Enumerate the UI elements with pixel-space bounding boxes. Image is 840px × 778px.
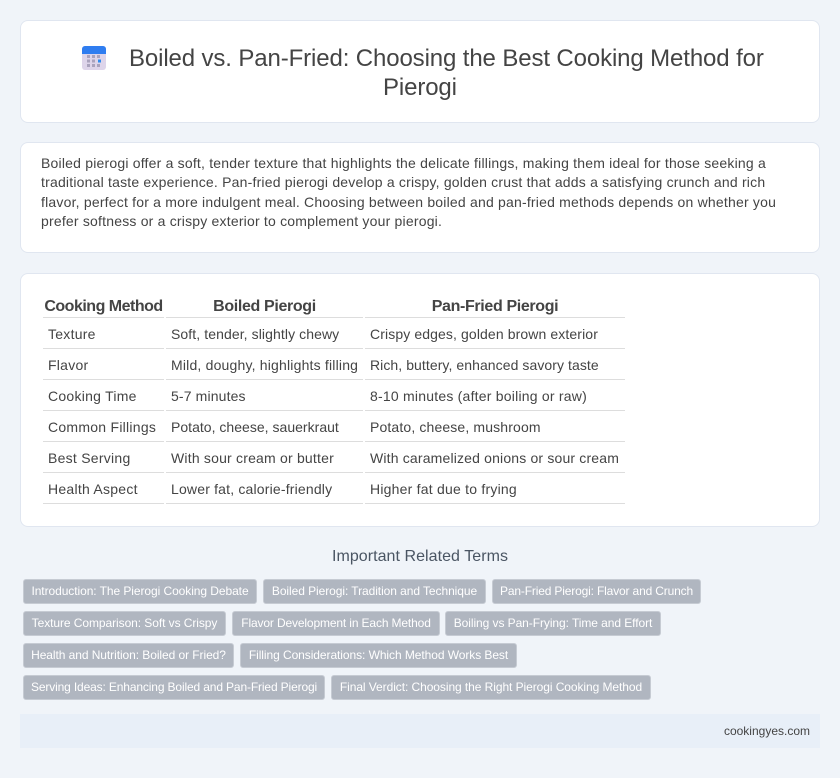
table header: Boiled Pierogi: [213, 298, 316, 315]
heading: title: Pierogi: [383, 74, 457, 101]
row: flavor: [48, 357, 599, 373]
tag: [445, 611, 661, 636]
tag: [263, 579, 486, 604]
tag: Health and Nutrition: Boiled or Fried?: [31, 648, 226, 662]
tag: [23, 675, 325, 700]
heading: important related terms: Important Related Terms: [332, 548, 508, 565]
text block: introduction: prefer softness or a crispy exterior to complement your pierogi.: [41, 213, 442, 229]
tag: Flavor Development in Each Method: [241, 616, 431, 630]
tag: [331, 675, 651, 700]
panel: comparison table: [20, 273, 820, 527]
tag: Boiling vs Pan-Frying: Time and Effort: [454, 616, 652, 630]
table header: Cooking Method: [44, 298, 163, 315]
icon: calendar: [82, 46, 106, 70]
row: health aspect: [48, 481, 517, 497]
panel: introduction: [20, 142, 820, 253]
tag: [23, 579, 257, 604]
table: cooking method comparison: [43, 298, 625, 504]
tag: [492, 579, 701, 604]
tag: Pan-Fried Pierogi: Flavor and Crunch: [500, 584, 693, 598]
row: texture: [48, 326, 598, 342]
tag: Texture Comparison: Soft vs Crispy: [32, 616, 217, 630]
row: cooking time: 5-7 minutes: [171, 388, 246, 404]
row: common fillings: [48, 419, 541, 435]
tag: Introduction: The Pierogi Cooking Debate: [31, 584, 249, 598]
row: common fillings: Potato, cheese, sauerkraut: [171, 419, 339, 435]
row: cooking time: Cooking Time: [48, 388, 137, 404]
row: best serving: With sour cream or butter: [171, 450, 334, 466]
footer bar: [20, 714, 820, 748]
row: texture: Texture: [48, 326, 96, 342]
row: best serving: With caramelized onions or sour cream: [370, 450, 619, 466]
row: flavor: Mild, doughy, highlights filling: [171, 357, 358, 373]
text block: introduction: Boiled pierogi offer a soft, tender texture that highlights the delicate fillings, making them ideal for those seeking a: [41, 155, 766, 171]
tag: Serving Ideas: Enhancing Boiled and Pan-Fried Pierogi: [31, 680, 317, 694]
footer source text: cookingyes.com: [724, 724, 810, 738]
table header: [44, 298, 558, 315]
text block: introduction: traditional taste experience. Pan-fried pierogi develop a crispy, golden crust that adds a satisfying crunch and rich: [41, 174, 765, 190]
row: common fillings: Potato, cheese, mushroom: [370, 419, 541, 435]
row: health aspect: Lower fat, calorie-friendly: [171, 481, 332, 497]
heading: title: [129, 45, 764, 101]
tag: Boiled Pierogi: Tradition and Technique: [272, 584, 477, 598]
tag: Final Verdict: Choosing the Right Pierogi Cooking Method: [340, 680, 642, 694]
heading: title: Boiled vs. Pan-Fried: Choosing the Best Cooking Method for: [129, 45, 764, 72]
row: texture: Soft, tender, slightly chewy: [171, 326, 339, 342]
row: common fillings: Common Fillings: [48, 419, 156, 435]
tag: [23, 643, 234, 668]
tag list: related terms: [23, 579, 701, 700]
row: cooking time: [48, 388, 587, 404]
row: best serving: Best Serving: [48, 450, 130, 466]
row: health aspect: Health Aspect: [48, 481, 138, 497]
tag: [240, 643, 517, 668]
tag: Filling Considerations: Which Method Works Best: [249, 648, 508, 662]
panel: title header: [20, 20, 820, 123]
row: best serving: [48, 450, 619, 466]
row: flavor: Rich, buttery, enhanced savory taste: [370, 357, 599, 373]
table header: Pan-Fried Pierogi: [432, 298, 558, 315]
tag: [23, 611, 226, 636]
row: texture: Crispy edges, golden brown exterior: [370, 326, 598, 342]
text block: introduction: flavor, perfect for a more indulgent meal. Choosing between boiled and pan-fried methods depends on whether you: [41, 194, 776, 210]
row: flavor: Flavor: [48, 357, 88, 373]
text block: introduction: [41, 155, 776, 229]
tag: [232, 611, 440, 636]
row: health aspect: Higher fat due to frying: [370, 481, 517, 497]
row: cooking time: 8-10 minutes (after boiling or raw): [370, 388, 587, 404]
